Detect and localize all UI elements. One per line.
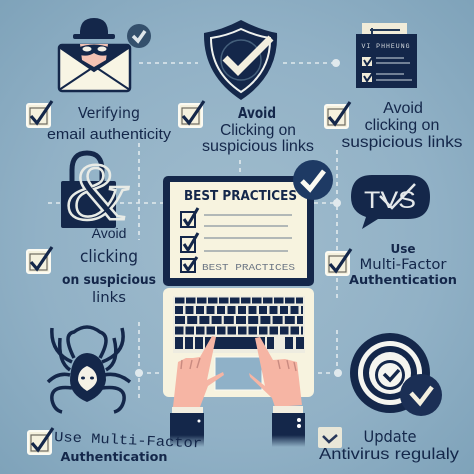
text: multi-factor right: Use (390, 242, 416, 256)
checkbox (318, 427, 342, 448)
text: avoid left: Avoid (92, 225, 126, 241)
touchpad (215, 357, 262, 390)
icon: checklist document: VI PHHEUNG (361, 43, 411, 50)
text: avoid center: Clicking on (220, 122, 296, 139)
icon: spy envelope (59, 18, 130, 91)
icon: spider (48, 327, 130, 412)
text: avoid left (62, 225, 156, 306)
icon: check badge (127, 24, 151, 48)
screen title: BEST PRACTICES (184, 188, 297, 204)
icon: shield (204, 20, 277, 100)
text: avoid left: on suspicious (62, 273, 156, 288)
text: update antivirus (319, 427, 459, 463)
checkbox (325, 102, 350, 128)
checkbox (27, 101, 52, 127)
text: avoid left: clicking (80, 247, 138, 267)
screen checklist: BEST PRACTICES (202, 263, 295, 273)
icon: target with badge (350, 333, 442, 416)
icon: padlock with ampersand: & (65, 146, 129, 237)
keyboard (175, 300, 304, 343)
text: verifying: Verifying (78, 104, 140, 122)
text: multi-factor right (349, 242, 457, 287)
screen checklist (181, 208, 295, 273)
text: avoid center: suspicious links (202, 138, 314, 155)
text: avoid right (342, 100, 462, 151)
hand left (170, 336, 224, 447)
text: avoid center (202, 104, 314, 155)
dotted connectors (48, 59, 342, 398)
text: update antivirus: Update (364, 427, 416, 446)
checkbox (326, 249, 351, 275)
laptop base (163, 288, 314, 397)
icon: checklist document (356, 23, 417, 88)
text: avoid right: Avoid (383, 100, 423, 117)
icon: speech bubble: TVS (364, 187, 416, 214)
checkbox (27, 247, 52, 273)
text: multi-factor left: Authentication (60, 449, 168, 464)
checkbox (28, 428, 53, 454)
text: multi-factor left: Use Multi-Factor (54, 430, 202, 452)
icon: screen badge (293, 160, 333, 200)
checkbox (179, 101, 204, 127)
text: update antivirus: Antivirus regulaly (319, 446, 459, 463)
laptop screen (163, 176, 314, 286)
text: multi-factor right: Multi-Factor (360, 257, 447, 273)
text: avoid right: suspicious links (342, 134, 462, 151)
hand right (249, 337, 305, 447)
text: avoid left: links (92, 290, 126, 306)
text: avoid right: clicking on (365, 117, 439, 134)
text: verifying (47, 104, 172, 143)
text: verifying: email authenticity (47, 126, 172, 143)
text: multi-factor left (54, 430, 202, 464)
text: avoid center: Avoid (238, 104, 276, 122)
text: multi-factor right: Authentication (349, 272, 457, 287)
icon: speech bubble (351, 175, 430, 229)
